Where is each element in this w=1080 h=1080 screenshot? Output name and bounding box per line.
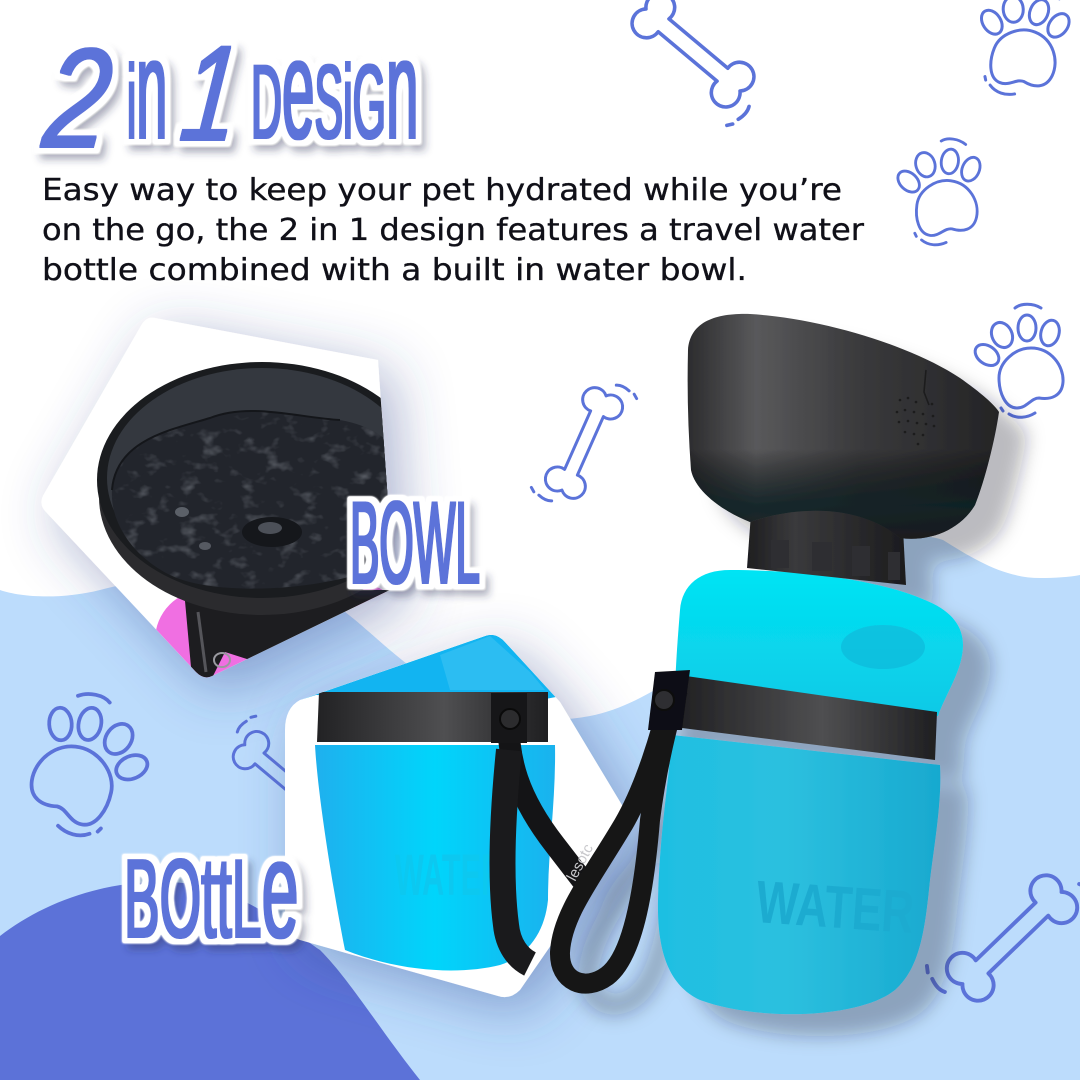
light blue wave — [0, 536, 1080, 1080]
water — [112, 412, 388, 588]
hanging strap loop — [560, 690, 678, 984]
small bottle strap — [491, 693, 582, 964]
bowl cap — [688, 314, 999, 539]
strap band — [682, 676, 937, 760]
icon: bone centre — [529, 369, 639, 517]
icon: small bone lower left — [232, 714, 285, 791]
main bottle — [560, 314, 999, 1014]
heading: 2 in 1 Design: 1 — [175, 19, 247, 169]
bowl lower band — [99, 418, 388, 615]
pink bottle behind bowl — [156, 598, 252, 678]
strap brand: lesotc — [564, 841, 597, 884]
icon: paw right — [971, 304, 1063, 417]
icon: paw middle right — [886, 132, 987, 250]
panel: bowl close-up — [41, 318, 427, 690]
bottle body — [315, 745, 555, 970]
heading: 2 in 1 Design: DeSiGn — [251, 10, 419, 169]
body text: Easy way to keep your pet hydrated while you’re — [42, 173, 842, 208]
WATER emboss: WATER — [395, 843, 503, 908]
body text: on the go, the 2 in 1 design features a travel water — [42, 213, 865, 248]
label: Bottle: BOttLe — [124, 812, 299, 968]
WATER emboss: WATER — [754, 868, 916, 946]
heading: 2 in 1 Design — [37, 9, 419, 178]
strap tab — [648, 670, 690, 730]
icon: paw top right — [954, 0, 1080, 108]
dark blue wave — [0, 882, 420, 1080]
heading: 2 in 1 Design: 2 — [37, 20, 119, 178]
icon: bone top — [608, 0, 778, 130]
body text: bottle combined with a built in water bowl. — [42, 253, 747, 288]
bowl rim — [97, 362, 388, 598]
body text — [42, 173, 865, 288]
bottle lower body — [658, 735, 940, 1014]
bowl stand — [184, 590, 390, 678]
label: BOWL: BOWL — [350, 477, 480, 608]
icon: bone lower right — [922, 849, 1080, 1027]
panel: bottle close-up — [285, 635, 634, 997]
bottle upper body — [675, 570, 963, 716]
heading: 2 in 1 Design: in — [127, 9, 167, 168]
strap band — [317, 692, 548, 742]
bottle top — [300, 635, 556, 700]
neck — [747, 500, 906, 585]
speaker dots — [896, 370, 935, 445]
icon: paw lower left — [23, 685, 164, 848]
